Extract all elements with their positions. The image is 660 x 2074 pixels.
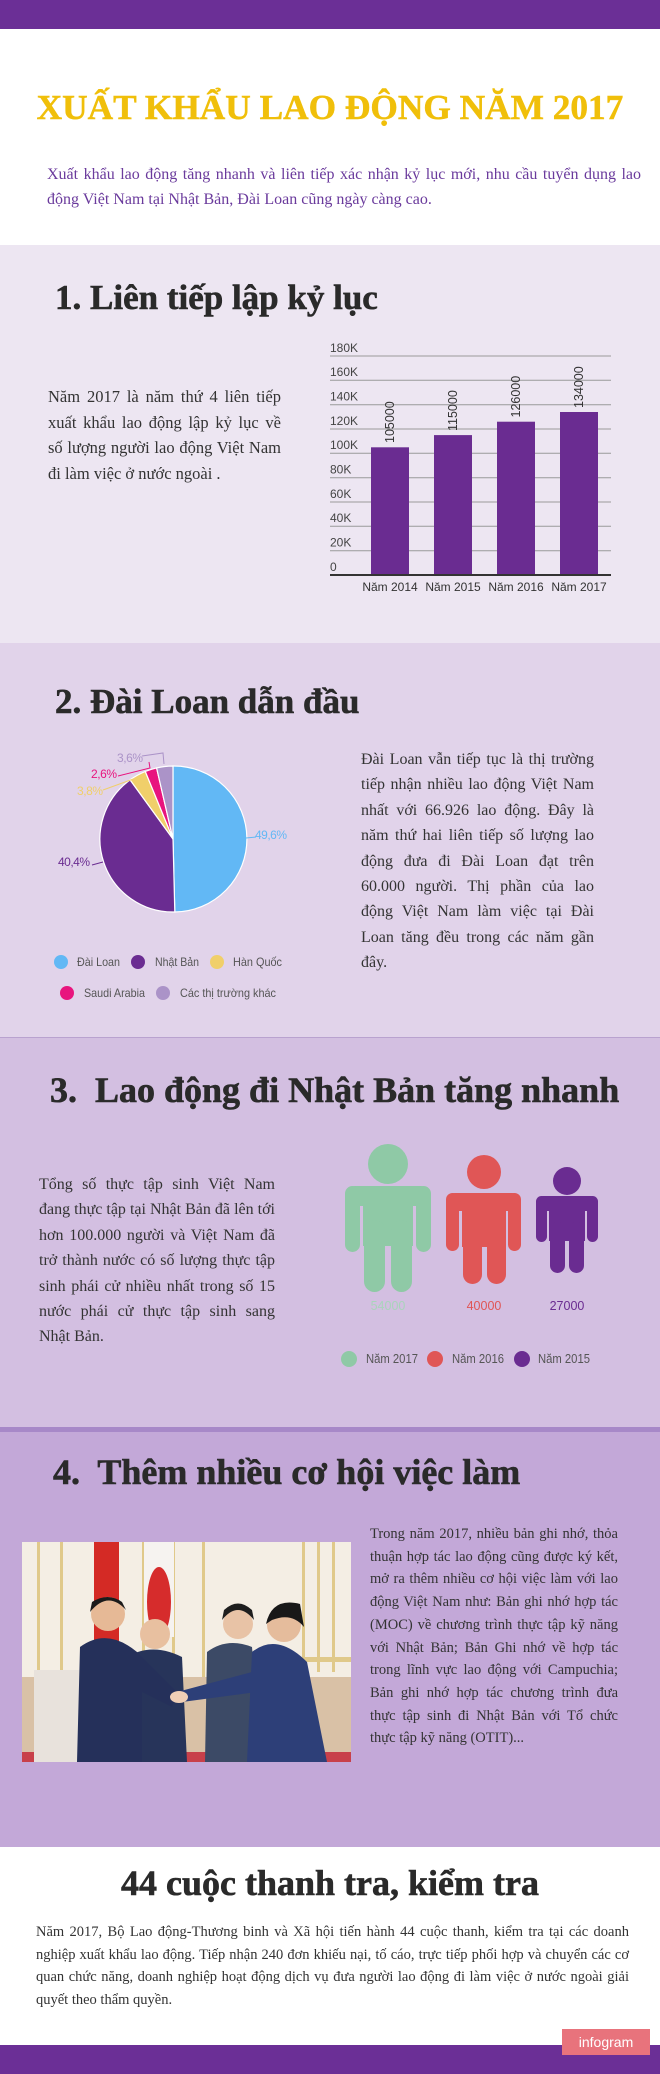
bar chart: 60K	[330, 487, 351, 501]
icon chart: people: 40000	[467, 1299, 501, 1313]
icon: red person	[446, 1155, 521, 1284]
infogram tag: infogram	[579, 2034, 633, 2050]
pie legend: Đài Loan	[77, 955, 120, 969]
pie chart: 40,4%	[58, 855, 90, 869]
icon chart: people	[345, 1144, 598, 1313]
infogram tag	[562, 2029, 650, 2055]
text block 5: Năm 2017, Bộ Lao động-Thương binh và Xã hội tiến hành 44 cuộc thanh, kiểm tra tại các doanh nghiệp xuất khẩu lao động. Tiếp nhận 240 đơn khiếu nại, tố cáo, trực tiếp phối hợp và chuyển các cơ quan chức năng, doanh nghiệp hoạt động dịch vụ đưa người lao động đi làm việc ở nước ngoài giải quyết theo thẩm quyền.	[36, 1924, 629, 2008]
text block 2: Đài Loan vẫn tiếp tục là thị trường tiếp nhận nhiều lao động Việt Nam nhất với 66.926 lao động. Đây là năm thứ hai liên tiếp số lượng lao động đưa đi Đài Loan đạt trên 60.000 người. Thị phần của lao động Việt Nam làm việc tại Đài Loan tăng đều trong các năm gần đây.	[361, 751, 594, 971]
panel: section 3	[0, 1037, 660, 1427]
pie legend: Các thị trường khác	[180, 986, 276, 1000]
bar chart: 134000	[572, 366, 586, 408]
pie legend: Hàn Quốc	[233, 955, 282, 969]
pie chart: 49,6%	[255, 828, 287, 842]
bar chart: Năm 2014	[362, 580, 418, 594]
title: XUẤT KHẨU LAO ĐỘNG NĂM 2017	[37, 88, 623, 127]
bar chart: 140K	[330, 390, 358, 404]
pie legend	[54, 955, 282, 1000]
bar chart: Năm 2017	[551, 580, 607, 594]
icon chart: people: 27000	[550, 1299, 584, 1313]
people legend: Năm 2016	[452, 1352, 504, 1366]
heading 2: 2. Đài Loan dẫn đầu	[55, 682, 359, 721]
people legend: Năm 2017	[366, 1352, 418, 1366]
heading 5: 44 cuộc thanh tra, kiểm tra	[121, 1863, 539, 1903]
bar chart: Năm 2016	[488, 580, 544, 594]
pie legend: Saudi Arabia	[84, 986, 145, 1000]
bar chart: 160K	[330, 365, 358, 379]
people legend: Năm 2015	[538, 1352, 590, 1366]
pie chart: 3,8%	[77, 784, 103, 798]
bottom bar	[0, 2045, 660, 2074]
icon: green person	[345, 1144, 431, 1292]
bar chart: Năm 2015	[425, 580, 481, 594]
text block 4: Trong năm 2017, nhiều bản ghi nhớ, thỏa thuận hợp tác lao động cũng được ký kết, mở ra thêm nhiều cơ hội việc làm với lao động Việt Nam như: Bản ghi nhớ hợp tác (MOC) về chương trình thực tập kỹ năng với Nhật Bản; Bản Ghi nhớ về hợp tác trong lĩnh vực lao động với Campuchia; Bản ghi nhớ hợp tác chương trình đưa thực tập sinh đi Nhật Bản với Tổ chức thực tập kỹ năng (OTIT)...	[370, 1526, 618, 1746]
bar chart: 20K	[330, 536, 351, 550]
bar chart: 180K	[330, 341, 358, 355]
people legend	[341, 1351, 590, 1367]
photo: signing ceremony	[22, 1542, 351, 1762]
top bar	[0, 0, 660, 29]
bar chart: 105000	[383, 401, 397, 443]
panel: section 1	[0, 245, 660, 643]
heading 3: 3. Lao động đi Nhật Bản tăng nhanh	[50, 1070, 619, 1110]
bar chart: 120K	[330, 414, 358, 428]
pie chart: 3,6%	[117, 751, 143, 765]
text block 1: Năm 2017 là năm thứ 4 liên tiếp xuất khẩu lao động lập kỷ lục về số lượng người lao động Việt Nam đi làm việc ở nước ngoài .	[48, 387, 281, 483]
subtitle: Xuất khẩu lao động tăng nhanh và liên tiếp xác nhận kỷ lục mới, nhu cầu tuyển dụng lao động Việt Nam tại Nhật Bản, Đài Loan cũng ngày càng cao.	[47, 166, 641, 208]
bar chart: 126000	[509, 376, 523, 418]
bar chart: 80K	[330, 462, 351, 476]
heading 4: 4. Thêm nhiều cơ hội việc làm	[53, 1452, 520, 1492]
bar chart: 115000	[446, 390, 460, 431]
text block 3: Tổng số thực tập sinh Việt Nam đang thực tập tại Nhật Bản đã lên tới hơn 100.000 người và Việt Nam đã trở thành nước có số lượng thực tập sinh phái cử nhiều nhất trong số 15 nước phái cử thực tập sinh sang Nhật Bản.	[39, 1176, 275, 1345]
panel: section 4	[0, 1427, 660, 1847]
heading 1: 1. Liên tiếp lập kỷ lục	[55, 278, 378, 317]
pie chart: 2,6%	[91, 767, 117, 781]
bar chart: 100K	[330, 438, 358, 452]
icon: purple person	[536, 1167, 598, 1273]
pie legend: Nhật Bản	[155, 955, 199, 969]
panel: section 2	[0, 643, 660, 1037]
bar chart: 0	[330, 560, 337, 574]
pie chart	[58, 751, 287, 913]
bar chart: 40K	[330, 511, 351, 525]
bar chart	[330, 341, 611, 594]
icon chart: people: 54000	[371, 1299, 405, 1313]
